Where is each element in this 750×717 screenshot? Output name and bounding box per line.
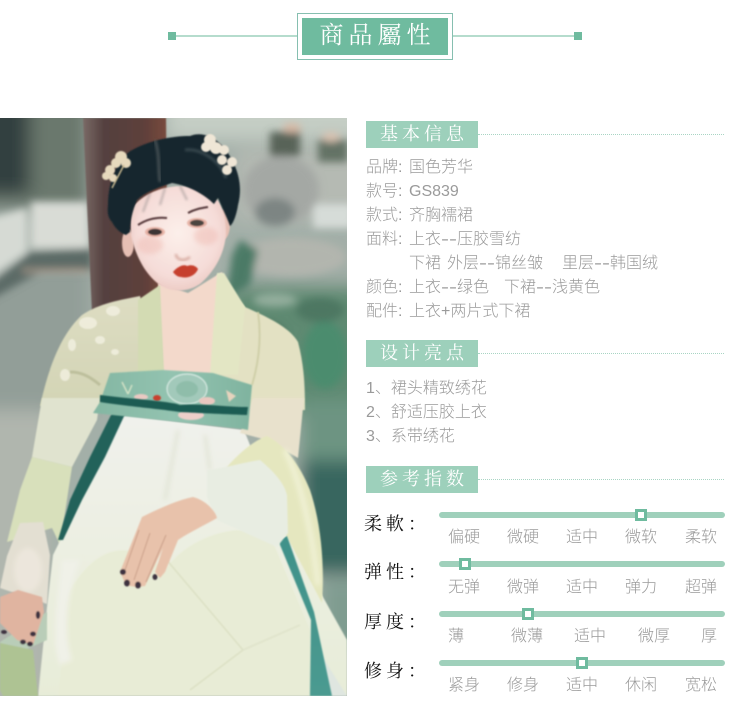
- text: 下裙 浅黄色: [504, 279, 600, 296]
- text: 上衣+两片式下裙: [409, 303, 530, 320]
- fit track: [439, 660, 725, 666]
- fit scale: 紧身: [448, 677, 480, 694]
- text: 齐胸襦裙: [409, 207, 473, 224]
- heading: design highlights: 设计亮点: [380, 343, 468, 363]
- highlight 1: 1、裙头精致绣花: [366, 380, 487, 397]
- eyes: [145, 218, 207, 237]
- spec: fabric skirt: 里层 韩国绒: [562, 255, 658, 272]
- softness marker: [635, 509, 647, 521]
- panel: reference index: [364, 466, 725, 694]
- text: 上衣 绿色: [409, 279, 489, 296]
- row: elasticity: [364, 558, 725, 596]
- title plate: [297, 13, 453, 60]
- collar: [138, 273, 245, 375]
- elasticity scale: [448, 578, 717, 596]
- elasticity track: [439, 561, 725, 567]
- elasticity label: 弹性：: [364, 562, 430, 582]
- softness scale: 偏硬: [448, 529, 480, 546]
- left sleeve: [0, 398, 100, 604]
- title banner: [168, 13, 582, 60]
- thickness scale: 薄: [448, 628, 464, 645]
- thickness scale: 微薄: [511, 628, 543, 645]
- waist band: [93, 370, 252, 430]
- fit scale: 修身: [507, 677, 539, 694]
- spec: style: [366, 206, 473, 224]
- nose shadow: [176, 254, 190, 260]
- eyebrows: [138, 207, 208, 225]
- lips: [173, 265, 198, 278]
- fit marker: [576, 657, 588, 669]
- right rule with square end: [453, 32, 582, 40]
- softness scale: 适中: [566, 529, 598, 546]
- elasticity scale: 微弹: [507, 579, 539, 596]
- spec: colour: [366, 278, 600, 296]
- right hand: [120, 497, 217, 588]
- text: GS839: [409, 183, 459, 200]
- softness scale: 柔软: [685, 529, 717, 546]
- fit label: 修身：: [364, 661, 430, 681]
- fit scale: 宽松: [685, 677, 717, 694]
- spec: model: 款号:: [366, 183, 402, 200]
- spec: model: [366, 182, 459, 200]
- sleeve embroidery dots: [60, 306, 120, 381]
- spec: fabric skirt: 下裙: [409, 255, 441, 272]
- softness scale: 微软: [625, 529, 657, 546]
- text: --: [536, 279, 552, 296]
- thickness scale: [448, 628, 717, 645]
- heading: basic info: 基本信息: [380, 124, 468, 144]
- text: --: [441, 231, 457, 248]
- spec: fabric skirt: --: [479, 255, 495, 272]
- skirt: [38, 415, 347, 696]
- thickness label: 厚度：: [364, 612, 430, 632]
- spec: fabric: [366, 230, 521, 248]
- thickness marker: [522, 608, 534, 620]
- elasticity marker: [459, 558, 471, 570]
- cheeks: [137, 227, 218, 254]
- spec: fabric: 面料:: [366, 231, 402, 248]
- neck and chest: [158, 272, 226, 375]
- hair strands on forehead: [143, 186, 187, 212]
- hair parting: [155, 140, 160, 182]
- heading: reference index: 参考指数: [380, 469, 468, 489]
- spec: accessories: [366, 302, 530, 320]
- photo: woman in green hanfu: [0, 118, 347, 696]
- row: softness: [364, 509, 725, 546]
- title text: [302, 18, 448, 55]
- heading: basic info: [366, 121, 478, 148]
- head: [102, 134, 240, 290]
- thickness scale: 适中: [574, 628, 606, 645]
- sash tie: [100, 395, 248, 415]
- panel: basic info: [136, 121, 724, 402]
- dotted rule: [478, 134, 724, 135]
- spec: fabric skirt: --: [594, 255, 610, 272]
- fit scale: 休闲: [625, 677, 657, 694]
- thickness track: [439, 611, 725, 617]
- fit scale: [448, 676, 717, 694]
- elasticity scale: 适中: [566, 579, 598, 596]
- title text: 商品屬性: [320, 23, 436, 49]
- text: 国色芳华: [409, 159, 473, 176]
- softness scale: 微硬: [507, 529, 539, 546]
- right ribbon: [278, 536, 332, 696]
- dotted rule: [478, 353, 724, 354]
- hair flower left: [102, 151, 131, 188]
- elasticity scale: 无弹: [448, 579, 480, 596]
- spec: brand: 品牌:: [366, 159, 402, 176]
- right sleeve: [227, 398, 323, 603]
- ears: [122, 209, 230, 257]
- face: [130, 186, 226, 290]
- spec: fabric skirt: [409, 254, 658, 272]
- thickness scale: 厚: [701, 628, 717, 645]
- panel: design highlights: [366, 340, 724, 445]
- heading: design highlights: [366, 340, 478, 367]
- row: fit: [364, 657, 725, 694]
- highlight 3: 3、系带绣花: [366, 428, 455, 445]
- embroidered medallion: [167, 374, 207, 404]
- dotted rule: [478, 479, 724, 480]
- text: --: [441, 279, 457, 296]
- spec: style: 款式:: [366, 207, 402, 224]
- heading: reference index: [366, 466, 478, 493]
- upper garment shoulders: [40, 275, 305, 412]
- left hand and cuff: [0, 590, 47, 696]
- spec: accessories: 配件:: [366, 303, 402, 320]
- hair flower right: [201, 134, 237, 175]
- hair: [108, 134, 240, 235]
- softness label: 柔軟：: [364, 514, 430, 534]
- softness scale: [448, 528, 717, 546]
- thickness scale: 微厚: [638, 628, 670, 645]
- spec: fabric skirt: 外层 锦丝皱: [447, 255, 543, 272]
- spec: colour: 颜色:: [366, 279, 402, 296]
- hair shine: [185, 150, 226, 178]
- elasticity scale: 超弹: [685, 579, 717, 596]
- highlight 2: 2、舒适压胶上衣: [366, 404, 487, 421]
- wooden pillar: [83, 118, 168, 313]
- softness track: [439, 512, 725, 518]
- right cuff: [207, 460, 288, 547]
- spec: brand: [366, 158, 473, 176]
- left rule with square end: [168, 32, 297, 40]
- row: thickness: [364, 608, 725, 645]
- embroidered flowers: [122, 382, 236, 420]
- text: 上衣 压胶雪纺: [409, 231, 521, 248]
- fit scale: 适中: [566, 677, 598, 694]
- elasticity scale: 弹力: [625, 579, 657, 596]
- blurred garden background: [0, 90, 380, 717]
- left ribbon: [58, 397, 133, 540]
